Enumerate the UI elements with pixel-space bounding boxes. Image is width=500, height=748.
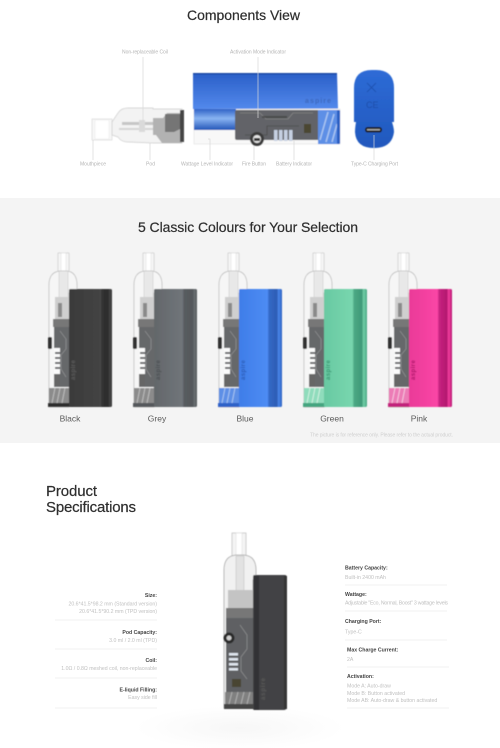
label: green: Green xyxy=(320,414,344,424)
spec: activation: Mode A: Auto-draw xyxy=(347,684,391,690)
device: blue xyxy=(218,253,282,407)
spec: size: Size: xyxy=(145,593,157,599)
spec: max charge current xyxy=(347,648,449,667)
specs: left column xyxy=(55,593,157,708)
device: black: aspire xyxy=(71,360,77,380)
callout lines xyxy=(93,57,374,160)
device: grey xyxy=(133,253,197,407)
spec: battery capacity xyxy=(345,566,447,585)
label: blue: Blue xyxy=(236,414,254,424)
callout labels xyxy=(80,50,399,168)
spec: coil xyxy=(55,658,157,678)
title: components view: Components View xyxy=(187,7,301,23)
product image: aspire xyxy=(261,677,267,700)
callout labels: Non-replaceable Coil xyxy=(122,50,168,56)
spec: activation: Mode AB: Auto-draw & button activated xyxy=(347,698,437,704)
spec: pod capacity xyxy=(55,630,157,649)
spec: size xyxy=(55,593,157,620)
spec: pod capacity: Pod Capacity: xyxy=(122,630,157,636)
spec: size: 20.6*41.5*98.2 mm (Standard version) xyxy=(68,602,157,608)
spec: coil: Coil: xyxy=(145,658,157,664)
device: pink: aspire xyxy=(411,360,417,380)
device core with blue shell xyxy=(193,73,340,146)
disclaimer: The picture is for reference only. Please refer to the actual product. xyxy=(310,432,453,438)
device: black xyxy=(48,253,112,407)
label: grey: Grey xyxy=(148,414,167,424)
spec: battery capacity: Battery Capacity: xyxy=(345,566,388,572)
spec: e-liquid filling: E-liquid Filling: xyxy=(120,688,157,694)
back plate with type-c port xyxy=(354,70,394,148)
spec: battery capacity: Built-in 2400 mAh xyxy=(345,575,386,581)
pod with mouthpiece xyxy=(92,108,184,143)
spec: wattage: Adjustable "Eco, Normal, Boost" 3 wattage levels xyxy=(345,600,448,606)
spec: charging port: Type-C xyxy=(345,630,362,636)
device: green xyxy=(303,253,367,407)
specs: right column xyxy=(345,566,449,708)
glow under product xyxy=(135,706,345,748)
spec: activation: Activation: xyxy=(347,674,374,680)
callout labels: Type-C Charging Port xyxy=(351,162,399,168)
device: green: aspire xyxy=(326,360,332,380)
callout labels: Battery Indicator xyxy=(276,162,312,168)
spec: max charge current: Max Charge Current: xyxy=(347,648,399,654)
panel: components view xyxy=(80,7,399,168)
back plate with type-c port: CE xyxy=(366,100,379,110)
callout labels: Activation Mode Indicator xyxy=(230,50,286,56)
heading: product specifications: Product xyxy=(46,483,98,500)
product image xyxy=(224,533,287,710)
spec: wattage xyxy=(345,592,448,611)
label: pink: Pink xyxy=(411,414,428,424)
spec: wattage: Wattage: xyxy=(345,592,367,598)
spec: charging port xyxy=(345,619,447,640)
device: grey: aspire xyxy=(156,360,162,380)
spec: pod capacity: 3.0 ml / 2.0 ml (TPD) xyxy=(109,638,157,644)
heading: product specifications: Specifications xyxy=(46,499,136,516)
panel: colours xyxy=(0,198,500,443)
device: blue: aspire xyxy=(241,360,247,380)
spec: max charge current: 2A xyxy=(347,657,354,663)
callout labels: Mouthpiece xyxy=(80,162,106,168)
spec: size: 20.6*41.5*90.2 mm (TPD version) xyxy=(79,609,157,615)
spec: activation: Mode B: Button activated xyxy=(347,691,405,697)
logo: aspire xyxy=(305,98,331,105)
heading: product specifications xyxy=(46,483,136,516)
spec: coil: 1.0Ω / 0.8Ω meshed coil, non-replaceable xyxy=(61,666,157,672)
spec: e-liquid filling: Easy side fill xyxy=(128,695,157,701)
callout labels: Fire Button xyxy=(242,162,266,168)
spec: e-liquid filling xyxy=(55,688,157,708)
device: pink xyxy=(388,253,452,407)
callout labels: Pod xyxy=(146,162,155,168)
spec: charging port: Charging Port: xyxy=(345,619,382,625)
heading: colours: 5 Classic Colours for Your Selection xyxy=(138,219,358,235)
spec: activation xyxy=(347,674,449,708)
label: black: Black xyxy=(60,414,81,424)
callout labels: Wattage Level Indicator xyxy=(181,162,233,168)
